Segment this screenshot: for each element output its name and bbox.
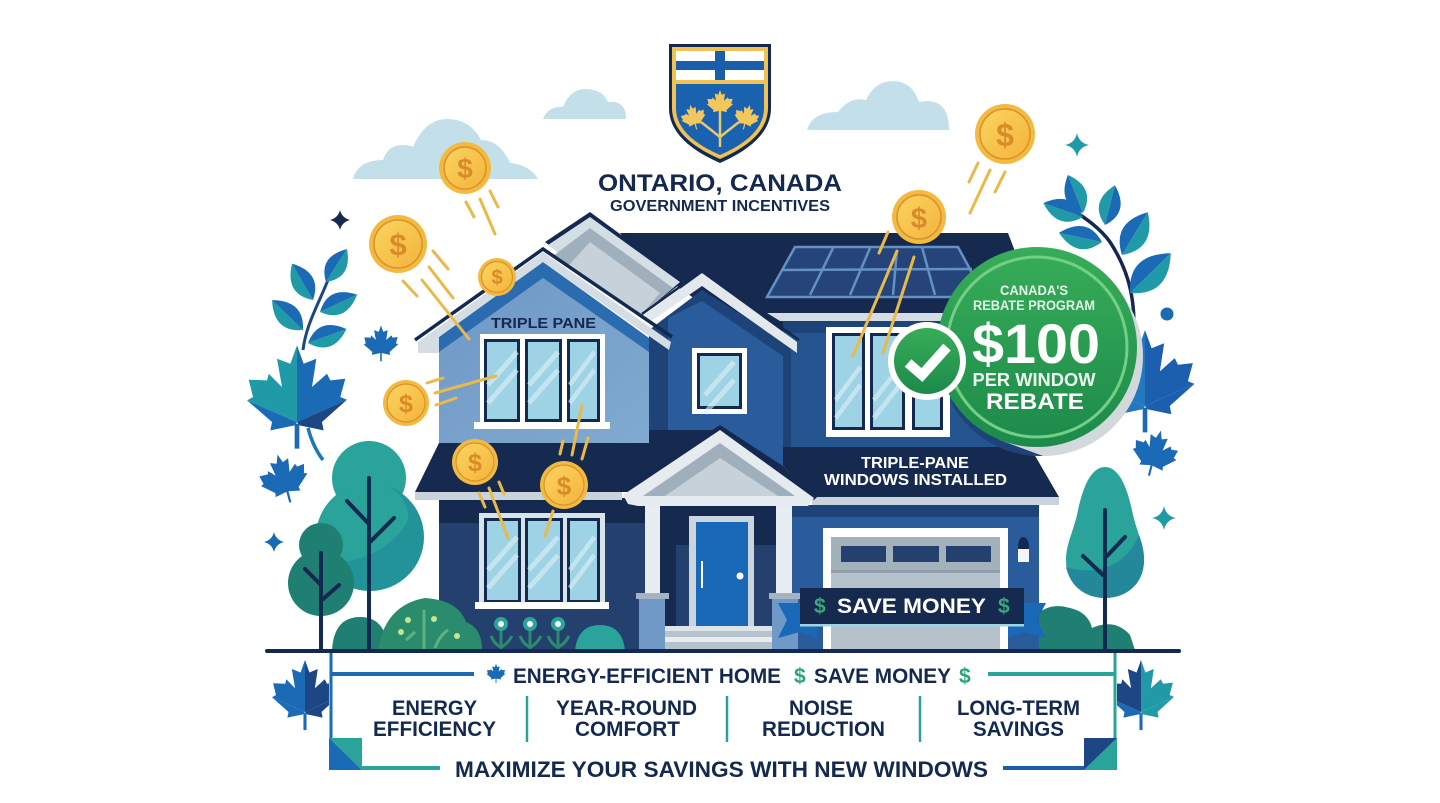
headline strip: SAVE MONEY — [814, 665, 951, 688]
benefit: energy efficiency: EFFICIENCY — [373, 718, 496, 741]
tree right — [1066, 467, 1144, 600]
lower right wall — [792, 505, 1039, 650]
coin 3 — [478, 258, 516, 296]
coin 3: $ — [491, 267, 503, 289]
porch steps — [665, 626, 772, 650]
coin 4: $ — [399, 390, 413, 418]
ground line — [267, 649, 1179, 653]
title: ONTARIO, CANADA — [598, 170, 842, 197]
bottom frame — [329, 653, 1117, 770]
benefit: energy efficiency — [373, 697, 496, 741]
center wall — [649, 290, 791, 466]
shield crest — [669, 44, 771, 163]
garage — [823, 528, 1008, 650]
wall lamp — [1018, 537, 1029, 562]
back gable — [545, 212, 684, 316]
coin 4 — [383, 380, 429, 426]
infographic scene — [247, 44, 1194, 777]
coin 7: $ — [911, 203, 927, 235]
rebate badge: REBATE PROGRAM — [973, 298, 1095, 313]
sparkles and dot — [264, 133, 1176, 552]
coin streaks — [403, 163, 1005, 538]
lower roof right — [783, 447, 1059, 497]
save money banner — [778, 588, 1046, 638]
cloud: center — [543, 89, 626, 119]
coin 8 — [975, 104, 1035, 164]
small window — [692, 348, 747, 414]
headline strip: $ — [959, 665, 971, 688]
benefit: year-round comfort — [556, 697, 697, 741]
headline strip — [487, 664, 971, 688]
coin 8: $ — [996, 117, 1014, 153]
porch gable — [621, 425, 820, 506]
benefit: energy efficiency: ENERGY — [392, 697, 477, 720]
lower left window — [475, 513, 609, 609]
lower roof left — [415, 430, 720, 497]
small maple leaves left — [254, 326, 398, 509]
lower left wall — [439, 498, 645, 650]
benefit: noise reduction — [762, 697, 885, 741]
main upper roof — [620, 233, 1045, 345]
benefit: year-round comfort: COMFORT — [575, 718, 680, 741]
left gable wall — [415, 249, 672, 443]
benefit: year-round comfort: YEAR-ROUND — [556, 697, 697, 720]
coin 2: $ — [389, 227, 407, 262]
small tree left — [288, 523, 354, 650]
solar panel — [767, 247, 985, 297]
benefit: long-term savings: LONG-TERM — [957, 697, 1080, 720]
cloud: right — [807, 81, 949, 130]
wall label: triple-pane windows installed: TRIPLE-PANE — [861, 455, 969, 472]
coin 1: $ — [457, 153, 473, 184]
front door — [689, 516, 754, 627]
benefit: noise reduction: NOISE — [789, 697, 853, 720]
title: GOVERNMENT INCENTIVES — [610, 198, 830, 215]
benefit: long-term savings: SAVINGS — [973, 718, 1064, 741]
plants at house base — [378, 598, 625, 650]
porch interior — [660, 506, 776, 650]
rebate badge: PER WINDOW — [972, 370, 1096, 390]
save money banner: SAVE MONEY — [837, 595, 986, 618]
rebate badge: $100 — [972, 312, 1100, 375]
label: triple pane: TRIPLE PANE — [491, 315, 596, 332]
coin 6: $ — [557, 471, 572, 501]
cloud: left — [353, 119, 538, 179]
upper right window — [826, 327, 950, 437]
headline strip: $ — [794, 665, 806, 688]
upper left window — [474, 334, 610, 429]
benefit: long-term savings — [957, 697, 1080, 741]
check mark icon — [888, 322, 966, 400]
coin 6 — [540, 461, 588, 509]
porch columns — [636, 506, 801, 650]
coin 2 — [369, 215, 427, 273]
bushes right — [1036, 598, 1135, 650]
bottom left maple leaf — [272, 660, 329, 730]
coin 5: $ — [468, 449, 482, 477]
rebate badge: REBATE — [986, 389, 1084, 414]
save money banner: $ — [814, 595, 826, 618]
title — [598, 170, 842, 215]
wall label: triple-pane windows installed — [824, 455, 1007, 489]
save money banner: $ — [998, 595, 1010, 618]
headline strip: ENERGY-EFFICIENT HOME — [513, 665, 781, 688]
coin 7 — [892, 190, 946, 244]
coin 5 — [452, 439, 498, 485]
benefit: noise reduction: REDUCTION — [762, 718, 885, 741]
right leaf branch — [1040, 171, 1181, 325]
big tree left — [316, 441, 424, 650]
tagline: MAXIMIZE YOUR SAVINGS WITH NEW WINDOWS — [455, 757, 988, 782]
right maple leaves — [1096, 330, 1194, 481]
bushes left — [332, 610, 388, 650]
wall label: triple-pane windows installed: WINDOWS INSTALLED — [824, 472, 1007, 489]
upper right wall — [783, 318, 1043, 448]
rebate badge — [937, 247, 1143, 456]
left leaf branch — [247, 244, 362, 460]
coin 1 — [439, 142, 491, 194]
house — [415, 212, 1059, 650]
bottom right maple leaf — [1117, 660, 1174, 730]
rebate badge: CANADA'S — [1000, 283, 1068, 298]
